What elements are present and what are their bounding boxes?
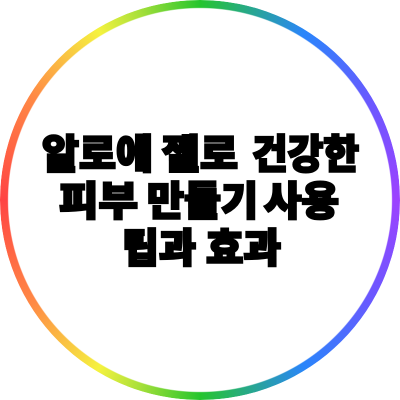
title line 2: 사용 [264,180,339,224]
title line 3: 효과 [206,227,281,271]
title line 2 [59,180,339,224]
title line 3: 팁과 [122,227,196,271]
title line 1: 알로에 [42,133,153,177]
title line 2: 피부 [59,180,138,224]
title line 3 [122,227,281,271]
title line 1 [42,133,359,177]
title line 2: 만들기 [147,180,258,224]
title line 1: 건강한 [252,133,359,177]
title line 1: 젤로 [162,133,238,177]
